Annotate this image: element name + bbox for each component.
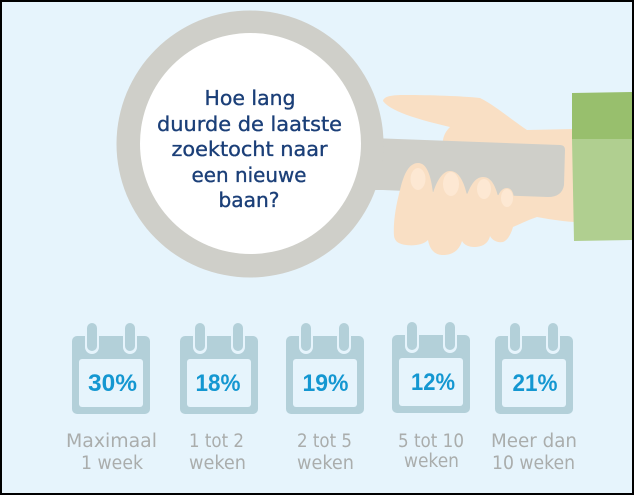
question heading: zoektocht naar (172, 137, 328, 161)
calendar item: 19% (286, 321, 364, 474)
illustration: hand holding magnifying glass (116, 10, 632, 278)
calendar item: 30%: 1 week (81, 453, 143, 474)
hand: thumb and wrist (383, 95, 574, 227)
calendar item: 30%: Maximaal (66, 431, 157, 452)
calendar item: 12% (392, 320, 470, 472)
calendar item: 18%: 18% (196, 370, 241, 397)
calendar item: 30% (66, 321, 157, 474)
calendar item: 21%: 21% (512, 370, 558, 397)
calendar item: 12%: 12% (411, 369, 455, 396)
calendar item: 19%: 2 tot 5 (297, 431, 352, 452)
calendar item: 30%: 30% (88, 370, 137, 397)
question heading: Hoe lang (204, 86, 296, 110)
question heading: baan? (218, 188, 280, 212)
calendar item: 19%: 19% (302, 370, 349, 397)
question heading (157, 86, 342, 212)
calendar item: 12%: 5 tot 10 (398, 431, 464, 452)
calendar item: 12%: weken (404, 451, 459, 472)
calendar item: 18% (180, 321, 258, 474)
sleeve cuff (572, 139, 632, 241)
magnifier handle (370, 138, 565, 197)
sleeve cuff top band (572, 92, 632, 139)
fingernails (410, 168, 513, 207)
magnifier lens (140, 33, 361, 254)
calendar item: 18%: weken (189, 453, 246, 474)
calendar item: 21%: Meer dan (491, 431, 577, 452)
calendar item: 21%: 10 weken (492, 453, 575, 474)
hand: fingers (394, 163, 514, 255)
question heading: een nieuwe (192, 163, 306, 187)
calendar item: 19%: weken (297, 453, 354, 474)
magnifier lens ring (116, 10, 384, 278)
calendar item: 21% (491, 321, 577, 474)
calendar item: 18%: 1 tot 2 (189, 431, 244, 452)
question heading: duurde de laatste (157, 112, 342, 136)
